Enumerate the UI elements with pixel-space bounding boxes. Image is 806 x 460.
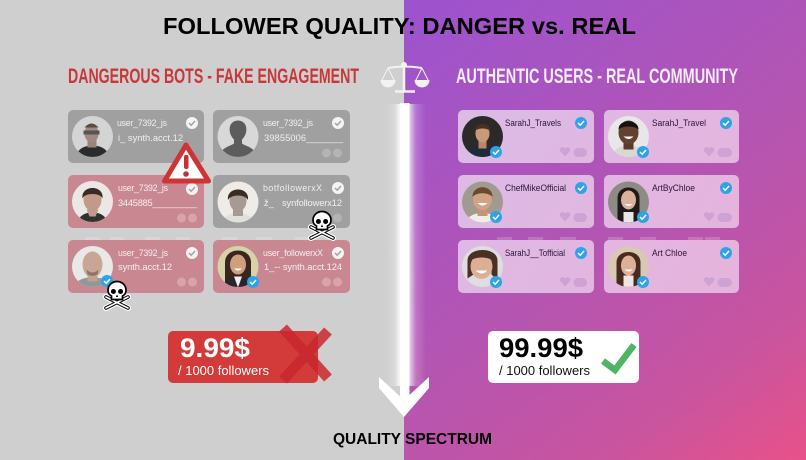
panel: left grey background (0, 0, 404, 460)
avatar: dark-haired woman (217, 246, 259, 288)
card: bot 5: user_7392_js (118, 248, 169, 258)
icon: skull and crossbones lower (106, 282, 128, 308)
avatar: blank-face young man (217, 181, 259, 223)
callout: real price (488, 331, 639, 383)
card: bot 1 (68, 110, 204, 163)
card: bot 6: user_followerxX (263, 248, 323, 258)
title: FOLLOWER QUALITY: DANGER vs. REAL (163, 13, 636, 39)
callout: bot price (168, 328, 328, 383)
arrow: central downward white arrow (379, 103, 429, 417)
card: real 5 (458, 240, 594, 293)
label: quality spectrum: QUALITY SPECTRUM (333, 431, 492, 448)
card: bot 2 (213, 110, 350, 163)
card: bot 4 (213, 175, 350, 228)
badge: verified on avatar (637, 276, 649, 288)
card: real 4 (604, 175, 739, 228)
avatar: chef man (462, 181, 504, 223)
panel: real accounts (458, 110, 739, 293)
card: bot 5: synth.acct.12 (118, 262, 172, 272)
badge: verified on avatar (637, 211, 649, 223)
card: real 4: ArtByChloe (652, 183, 695, 193)
card: bot 1: user_7392_js (117, 118, 168, 128)
icon: balance scales (380, 62, 430, 92)
avatar: man with dark jacket (462, 116, 504, 158)
card: bot 6: 1_-- synth.acct.124 (264, 262, 342, 272)
card: real 1: SarahJ_Travels (505, 118, 561, 128)
avatar: smiling man (608, 116, 650, 158)
badge: verified on avatar (490, 276, 502, 288)
panel: right purple-pink gradient background (404, 0, 806, 460)
avatar: long-haired woman (608, 181, 650, 223)
badge: verified on avatar (101, 275, 113, 287)
card: bot 1: i_ synth.acct.12 (118, 133, 183, 143)
avatar: bald man (72, 246, 114, 288)
card: bot 3: user_7392_js (118, 183, 169, 193)
card: bot 2: user_7392_js (263, 118, 314, 128)
avatar: brown-haired woman (608, 246, 650, 288)
card: real 3: ChefMikeOfficial (505, 183, 566, 193)
card: real 2: SarahJ_Travel (652, 118, 706, 128)
badge: verified on avatar (247, 276, 259, 288)
panel: bot accounts (68, 110, 350, 293)
card: bot 4: ž_ (264, 198, 275, 208)
icon: red cross (283, 328, 328, 380)
card: bot 3 (68, 175, 204, 228)
card: real 3 (458, 175, 594, 228)
avatar: glitched man (72, 116, 114, 158)
card: bot 4: botfollowerxX (263, 183, 322, 193)
badge: verified on avatar (490, 146, 502, 158)
badge: verified on avatar (490, 211, 502, 223)
callout: real price: / 1000 followers (499, 364, 590, 378)
card: real 6: Art Chloe (652, 248, 687, 258)
icon: warning triangle (164, 145, 208, 181)
card: bot 3: 3445885_________ (118, 198, 198, 208)
heading: dangerous bots: DANGEROUS BOTS - FAKE ENGAGEMENT (68, 65, 359, 88)
card: real 6 (604, 240, 739, 293)
card: real 2 (604, 110, 739, 163)
card: bot 5 (68, 240, 204, 293)
avatar: curly-haired woman (462, 246, 504, 288)
icon: green check (603, 345, 634, 370)
avatar: silhouette (217, 116, 259, 158)
icon: skull and crossbones upper (311, 212, 333, 238)
callout: bot price: / 1000 followers (178, 364, 269, 378)
card: bot 6 (213, 240, 350, 293)
card: real 1 (458, 110, 594, 163)
card: bot 4: synfollowerx12 (282, 198, 342, 208)
avatar: blank-face man (72, 180, 114, 222)
callout: bot price: 9.99$ (180, 333, 250, 363)
callout: real price: 99.99$ (499, 333, 583, 363)
card: real 5: SarahJ__Tofficial (505, 248, 565, 258)
badge: verified on avatar (637, 146, 649, 158)
card: bot 2: 39855006_______ (264, 133, 344, 143)
